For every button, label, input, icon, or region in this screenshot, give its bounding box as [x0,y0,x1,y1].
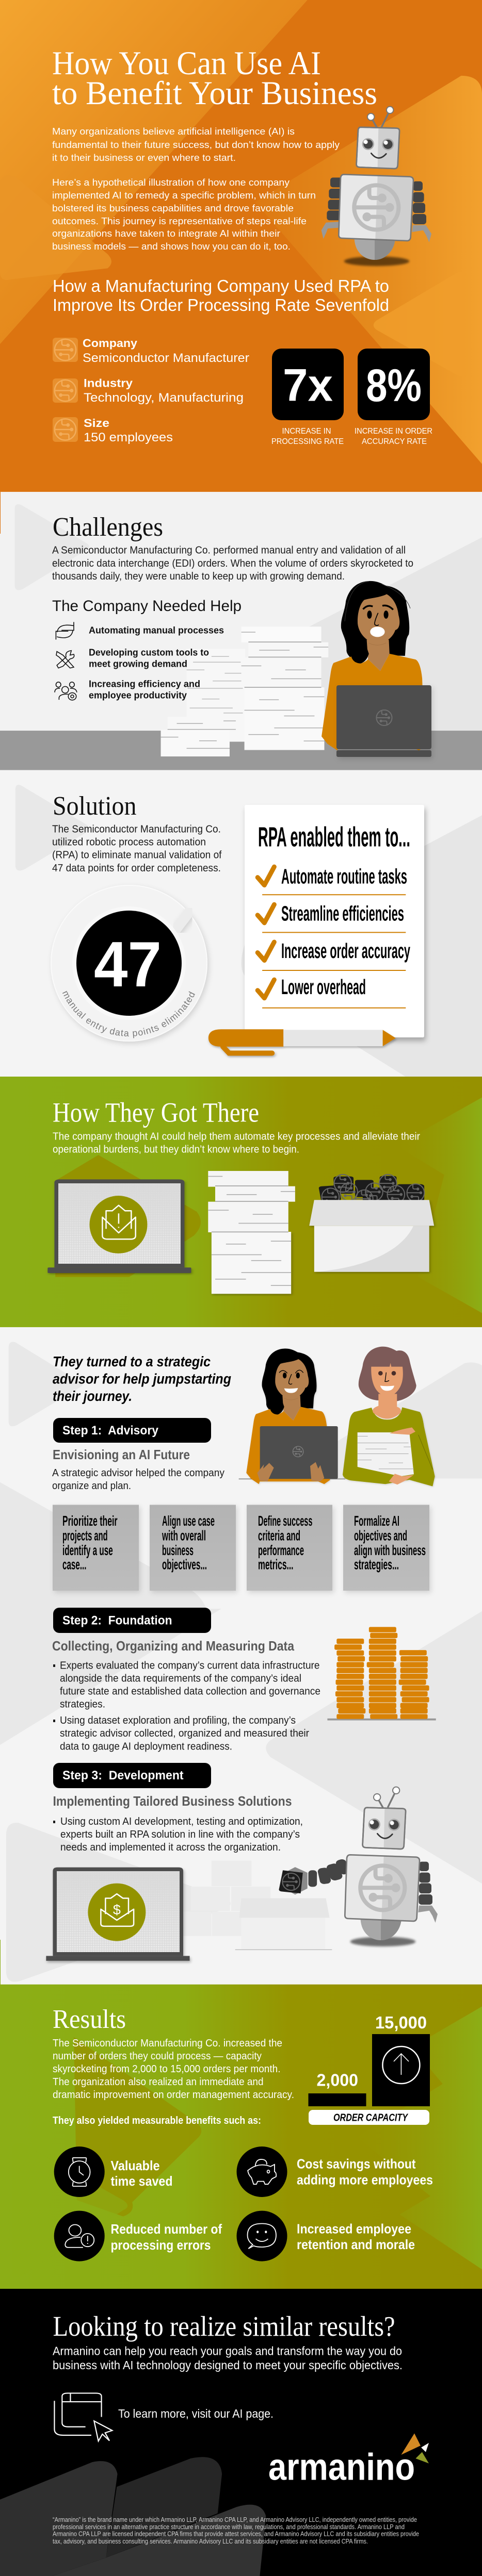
benefit: retention and morale: retention and morale [297,2237,415,2252]
title: How You Can Use AI [52,45,321,82]
body text [52,824,222,874]
stat: 8% accuracy rate: INCREASE IN ORDER [355,427,432,436]
green background [0,1985,482,2289]
panel: header intro [0,0,482,492]
intro paragraph 2: organizations have taken to integrate AI within their [52,228,280,239]
body text [53,2344,403,2372]
step 1 heading: Envisioning an AI Future [53,1447,190,1462]
dial: 47 data points [51,887,211,1046]
stat: 8% accuracy rate [355,349,432,446]
body text: A Semiconductor Manufacturing Co. performed manual entry and validation of all [52,544,406,556]
body text: dramatic improvement on order management accuracy. [53,2089,294,2101]
heading: How They Got There [53,1097,259,1128]
body text: The company thought AI could help them automate key processes and alleviate their [53,1131,420,1143]
intro paragraph 2: implemented AI to remedy a specific problem, which in turn [52,190,316,201]
step 3 heading: Implementing Tailored Business Solutions [53,1793,292,1809]
disclaimer: tax, advisory, and business consulting services. Armanino Advisory LLC and its subsidiary entities are not licensed CPA firms. [53,2538,368,2545]
company profile: size: 150 employees [84,431,173,444]
bar chart: order capacity: ORDER CAPACITY [333,2112,408,2124]
panel: how they got there [0,1077,482,1327]
illustration: laptop with invoice email [46,1868,190,1961]
intro paragraph 2: business models — and shows how you can do it, too. [52,241,291,252]
light background with triangles [0,1327,482,1985]
intro paragraph 2: bolstered its business capabilities and drove favorable [52,203,294,213]
icon: robot placing chip [279,1787,438,1946]
stat: 8% accuracy rate: ACCURACY RATE [362,437,427,446]
card: define: Define success [258,1513,312,1529]
icon: pen [208,1029,396,1053]
need: automating: Automating manual processes [89,625,224,635]
benefit: fewer errors: processing errors [110,2237,211,2253]
panel: results [0,1985,482,2289]
illustration: stressed woman at laptop [322,581,431,757]
card: prioritize [53,1505,139,1591]
body text: (RPA) to eliminate manual validation of [52,850,222,861]
green background [0,1077,482,1327]
lead-in: their journey. [53,1388,132,1404]
body text: Armanino can help you reach your goals and transform the way you do [53,2344,402,2358]
card: formalize: Formalize AI [354,1513,399,1529]
illustration: laptop with invoice email: $ [113,1902,121,1918]
intro paragraph 2: Here’s a hypothetical illustration of how one company [52,177,290,188]
intro paragraph 1: fundamental to their future success, but don’t know how to apply [52,140,340,150]
body text: business with AI technology designed to meet your specific objectives. [53,2358,403,2372]
card: define: performance [258,1542,304,1558]
step 2 bullets: strategies. [60,1699,105,1710]
panel: solution [0,770,482,1077]
card: prioritize: identify a use [62,1542,113,1558]
disclaimer: professional services in an alternative practice structure in accordance with law, regulations, and professional standards. Armanino LLP and [53,2523,405,2531]
card: align: business [162,1542,194,1558]
intro paragraph 1: Many organizations believe artificial intelligence (AI) is [52,126,295,137]
step 3: Step 3: Development [62,1769,184,1782]
body text [53,1131,420,1155]
benefit: time saved: time saved [110,2173,172,2189]
note paper: RPA benefits [245,805,424,1037]
illustration: stack of papers [208,1171,295,1294]
need: custom tools [89,647,209,669]
need: efficiency [89,679,200,701]
body text: utilized robotic process automation [52,837,206,848]
benefit: retention and morale [236,2211,415,2261]
heading: Solution [53,791,136,821]
step 1 text: organize and plan. [52,1480,131,1492]
paper stacks [161,626,328,756]
intro paragraph 2 [52,177,316,252]
dial: 47 data points: 47 [94,929,162,1000]
benefit: retention and morale: Increased employee [297,2221,411,2237]
body text: The organization also realized an immediate and [53,2076,263,2088]
lead-in: advisor for help jumpstarting [53,1371,231,1387]
step 3 [53,1763,211,1788]
black background [0,2289,482,2576]
company profile: company [53,337,249,365]
card: define: criteria and [258,1527,300,1544]
illustration: laptop with alert email [47,1179,191,1273]
step 2 heading: Collecting, Organizing and Measuring Data [52,1638,294,1654]
logo: armanino: armanino [268,2446,415,2488]
card: prioritize: Prioritize their [62,1513,118,1529]
card: align: with overall [162,1527,206,1544]
benefit: time saved: Valuable [110,2158,160,2173]
subheading: Improve Its Order Processing Rate Sevenfold [53,295,389,315]
benefit: cost savings: Cost savings without [297,2156,416,2172]
company profile: size: Size [84,417,109,430]
company profile: company: Company [83,337,138,350]
title: to Benefit Your Business [52,75,377,112]
checklist text [281,864,410,999]
illustration: faint boxes [183,1860,332,1950]
need: custom tools: meet growing demand [89,659,187,669]
dial: 47 data points: manual entry data points eliminated [62,991,195,1038]
subheading: How a Manufacturing Company Used RPA to [53,276,389,295]
step 2 bullets: Using dataset exploration and profiling, the company’s [60,1715,296,1726]
stat: 8% accuracy rate: 8% [366,359,422,411]
icon: people with gear [55,682,77,700]
body text: electronic data interchange (EDI) orders. When the volume of orders skyrocketed to [52,558,413,569]
heading: Results [53,2005,126,2034]
icon: robot [322,107,431,266]
body text: The Semiconductor Manufacturing Co. increased the [53,2038,282,2049]
body text: skyrocketing from 2,000 to 15,000 orders per month. [53,2063,281,2075]
bar chart: order capacity [309,2013,430,2125]
card: formalize [343,1505,429,1591]
body text: thousands daily, they were unable to keep up with growing demand. [52,571,345,582]
illustration: box of chips [309,1175,434,1272]
step 1 [53,1418,211,1443]
disclaimer: Armanino CPA LLP are licensed independent CPA firms that provide attest services, and Armanino Advisory LLC and its subsidiary entities provide [53,2531,419,2538]
card: align: Align use case [162,1513,215,1529]
step 2 bullets: data to gauge AI deployment readiness. [60,1741,232,1753]
stat: 7x processing rate [271,349,344,446]
card: formalize: strategies... [354,1556,399,1573]
benefit: fewer errors: Reduced number of [110,2221,222,2237]
step 2 bullets: future state and established data collection and governance [60,1686,320,1697]
benefit: cost savings [236,2146,433,2197]
step 3 bullet [53,1816,303,1853]
card: align: objectives... [162,1556,207,1573]
checklist text: Lower overhead [281,975,366,999]
card: prioritize: projects and [62,1527,108,1544]
benefit: time saved [54,2146,172,2197]
body text: number of orders they could process — capacity [53,2051,262,2062]
benefit: cost savings: adding more employees [297,2172,433,2188]
need: efficiency: Increasing efficiency and [89,679,200,689]
panel: challenges [0,492,482,770]
challenges background [0,492,482,770]
icon: tools [56,651,74,668]
checklist marks and rules [258,867,406,1008]
company profile: size [53,417,173,444]
illustration: stacks of coins [327,1627,436,1721]
heading: Challenges [53,513,163,542]
panel: strategic advisor steps [0,1327,482,1985]
card: define [247,1505,332,1591]
icon: browser with cursor [54,2393,112,2441]
body text: The Semiconductor Manufacturing Co. [52,824,221,835]
stat: 7x processing rate: 7x [283,359,333,410]
disclaimer: “Armanino” is the brand name under which Armanino LLP, Armanino CPA LLP, and Armanino Advisory LLC, independently owned entities, provide [53,2516,417,2523]
step 2 bullets: alongside the data requirements of the company’s ideal [60,1673,301,1685]
body text [52,544,413,582]
intro paragraph 1: it to their business or even where to start. [52,153,236,163]
step 1: Step 1: Advisory [62,1424,159,1438]
company profile: company: Semiconductor Manufacturer [83,351,249,365]
solution background [0,770,482,1077]
lead-in: They turned to a strategic [53,1353,211,1369]
bar chart: order capacity: 2,000 [317,2071,358,2090]
stat: 7x processing rate: INCREASE IN [282,427,331,436]
bar chart: order capacity: 15,000 [375,2013,427,2032]
subheading [53,276,389,315]
company profile: industry [53,376,244,405]
title [52,45,377,112]
card: prioritize: case... [62,1556,87,1573]
card: define: metrics... [258,1556,293,1573]
benefit: fewer errors [54,2211,222,2261]
panel: call to action [0,2289,482,2576]
disclaimer [53,2516,419,2545]
need: custom tools: Developing custom tools to [89,647,209,657]
step 3 bullet: Using custom AI development, testing and optimization, [60,1816,303,1827]
step 2 bullets [53,1660,320,1753]
card: align [150,1505,236,1591]
step 2: Step 2: Foundation [62,1614,172,1628]
company profile: industry: Technology, Manufacturing [84,391,244,405]
heading: Looking to realize similar results? [53,2310,395,2342]
step 2 bullets: Experts evaluated the company’s current data infrastructure [60,1660,320,1672]
orange background with triangles [0,0,482,492]
step 2 bullets: strategic advisor collected, organized and measured their [60,1728,309,1739]
lead-in [53,1353,231,1404]
intro paragraph 1 [52,126,340,163]
subheading: The Company Needed Help [52,598,242,615]
stat: 7x processing rate: PROCESSING RATE [271,437,344,446]
need: efficiency: employee productivity [89,690,187,701]
body text: operational burdens, but they didn’t know where to begin. [53,1144,299,1155]
link text: To learn more, visit our AI page. [118,2407,274,2420]
step 1 text [52,1467,224,1492]
icon: refresh [56,622,74,639]
step 3 bullet: experts built an RPA solution in line with the company’s [60,1829,300,1840]
step 1 text: A strategic advisor helped the company [52,1467,224,1479]
intro paragraph 2: outcomes. This journey is representative of steps real-life [52,216,307,226]
benefits lead-in: They also yielded measurable benefits such as: [53,2115,261,2126]
step 2 [53,1608,211,1633]
card: formalize: objectives and [354,1527,407,1544]
body text: 47 data points for order completeness. [52,863,221,874]
company profile: industry: Industry [84,376,133,390]
step 3 bullet: needs and implemented it across the organization. [60,1842,281,1853]
body text [53,2038,294,2101]
illustration: two advisors [239,1347,435,1487]
